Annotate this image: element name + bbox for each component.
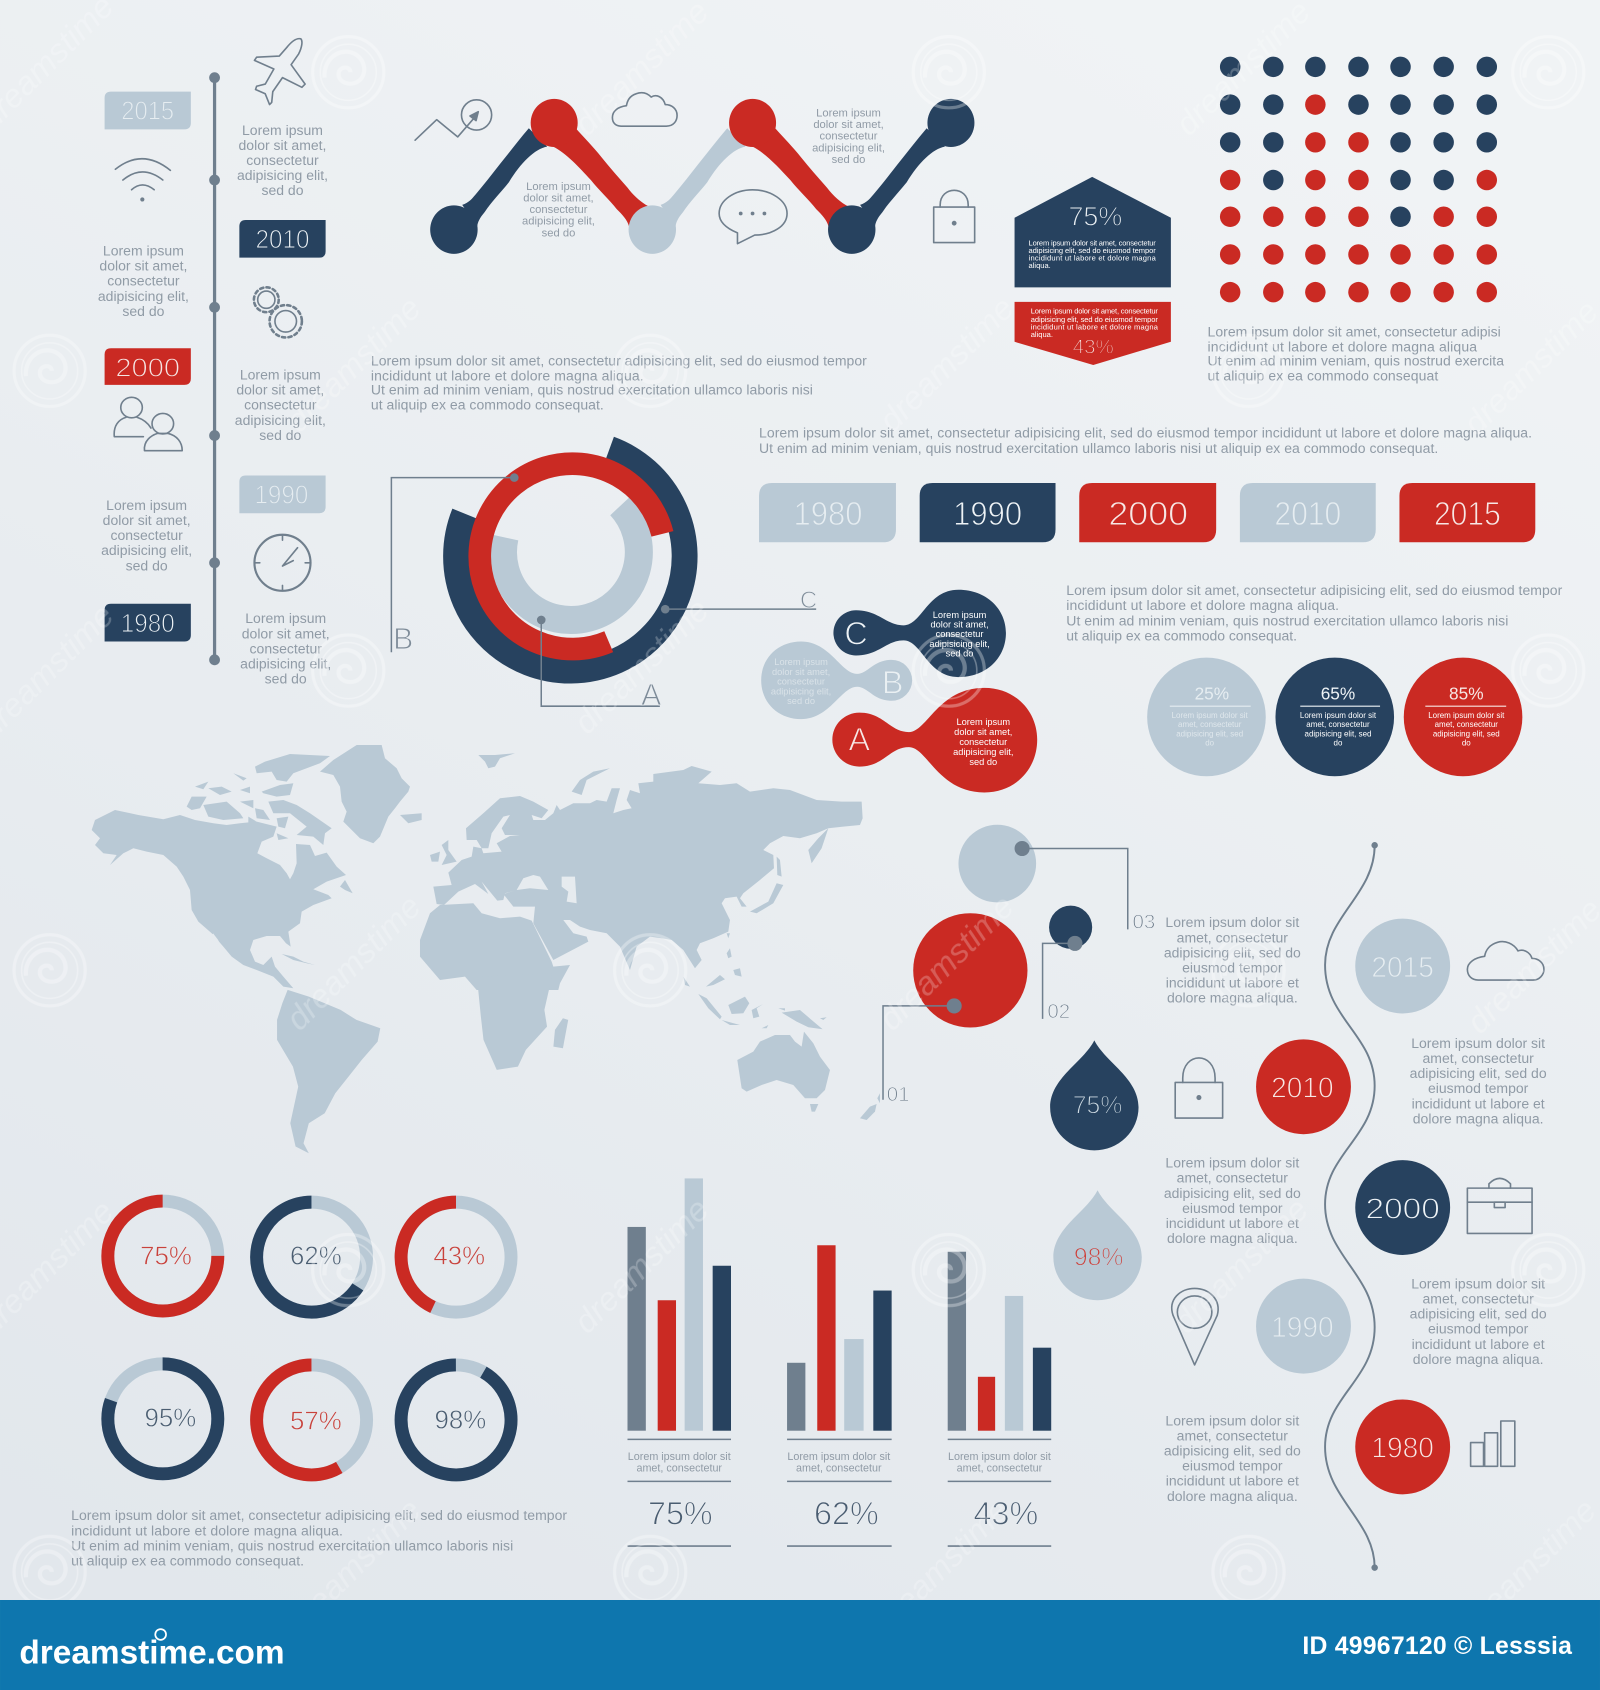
link: navy <box>860 128 945 226</box>
callout A: A <box>641 679 662 712</box>
tab 2015 <box>1399 483 1535 542</box>
panel: donut charts <box>108 1181 531 1495</box>
navy dots <box>1220 57 1497 227</box>
donut 43%: 43% <box>433 1243 485 1271</box>
panel: wavy timeline <box>1050 842 1547 1571</box>
navy hexagon top <box>1015 177 1171 287</box>
text block: dolor sit amet, <box>99 258 187 274</box>
tab 2010: 2010 <box>256 226 309 254</box>
Americas north <box>92 745 422 988</box>
text block: adipisicing elit, <box>240 655 331 671</box>
text block: dolor sit amet, <box>813 119 884 131</box>
Madagascar <box>553 1018 568 1048</box>
text block: incididunt ut labore et <box>1412 1336 1545 1352</box>
text block: dolor sit amet, <box>242 625 330 641</box>
red hexagon bottom <box>1015 302 1171 365</box>
circle 25%: Lorem ipsum dolor sit <box>1172 711 1249 720</box>
paragraph: incididunt ut labore et dolore magna aliqua. <box>71 1522 343 1538</box>
text block: incididunt ut labore et <box>1166 975 1299 991</box>
South America <box>277 990 380 1153</box>
blob A: sed do <box>969 757 997 767</box>
tab 2015: 2015 <box>121 98 174 126</box>
drop 98%: 98% <box>1074 1245 1123 1272</box>
tab 1980: 1980 <box>121 610 175 638</box>
timeline axis <box>209 72 220 665</box>
tab 1990 <box>239 475 326 513</box>
bar chart 62% <box>787 1245 892 1546</box>
text block: eiusmod tempor <box>1182 959 1283 975</box>
text block: Lorem ipsum dolor sit <box>1165 1412 1299 1428</box>
text: dreamstime <box>872 888 1022 1038</box>
callout B <box>391 473 519 656</box>
node 2000 <box>1355 1160 1450 1255</box>
text block: Lorem ipsum dolor sit <box>1165 914 1299 930</box>
blob A: adipisicing elit, <box>953 747 1013 757</box>
bubble 03: 03 <box>1133 910 1155 933</box>
navy hexagon top: incididunt ut labore et dolore magna <box>1029 253 1157 262</box>
bar chart 43%: amet, consectetur <box>957 1463 1043 1475</box>
circle 85% <box>1404 658 1522 776</box>
text block: amet, consectetur <box>1423 1050 1534 1066</box>
bar chart 62%: Lorem ipsum dolor sit <box>787 1451 890 1463</box>
text: dreamstime <box>567 1191 716 1341</box>
panel: wave chain chart <box>371 93 975 413</box>
text block: dolor sit amet, <box>103 512 191 528</box>
blob A: consectetur <box>959 737 1007 747</box>
bar chart 62%: amet, consectetur <box>796 1463 882 1475</box>
blob C <box>833 590 1006 677</box>
text block: incididunt ut labore et <box>1166 1215 1299 1231</box>
blob C: sed do <box>946 649 973 659</box>
text block: dolor sit amet, <box>523 192 594 204</box>
text block: adipisicing elit, <box>522 216 595 228</box>
text block: consectetur <box>110 527 183 543</box>
tab 2010 <box>1240 483 1376 542</box>
node 2015 <box>1355 919 1450 1013</box>
donut 62% <box>236 1181 388 1333</box>
blob A: dolor sit amet, <box>954 727 1012 737</box>
circle 65%: do <box>1334 739 1343 748</box>
circle 85%: do <box>1462 739 1471 748</box>
bar chart 75%: Lorem ipsum dolor sit <box>628 1451 731 1463</box>
text block: consectetur <box>244 397 317 413</box>
icon: gears <box>254 287 302 337</box>
paragraph: ut aliquip ex ea commodo consequat. <box>371 397 604 413</box>
text block: dolore magna aliqua. <box>1413 1351 1544 1367</box>
Oceania <box>683 933 880 1120</box>
paragraph: incididunt ut labore et dolore magna aliqua <box>1208 338 1477 354</box>
text block: sed do <box>122 303 165 319</box>
panel: ring chart <box>391 449 817 712</box>
text block: adipisicing elit, <box>812 142 885 154</box>
ring: red <box>480 464 662 649</box>
blob C: C <box>844 616 868 652</box>
callout B: B <box>393 623 413 656</box>
paragraph: ut aliquip ex ea commodo consequat. <box>1066 627 1297 643</box>
text block: Lorem ipsum dolor sit <box>1411 1035 1545 1051</box>
text block: amet, consectetur <box>1177 929 1288 945</box>
donut 98% <box>381 1345 531 1495</box>
logo swirl <box>155 1629 166 1640</box>
text: dreamstime <box>1166 1191 1316 1341</box>
circle 25%: 25% <box>1195 684 1229 704</box>
panel: year tabs <box>759 425 1535 542</box>
Gulf of California <box>213 934 224 953</box>
paragraph: Ut enim ad minim veniam, quis nostrud exercitation ullamco laboris nisi <box>71 1537 513 1553</box>
text block: Lorem ipsum <box>816 107 881 119</box>
tab 2015: 2015 <box>1434 496 1501 533</box>
circle 65%: amet, consectetur <box>1306 720 1370 729</box>
Eurasia <box>433 766 863 970</box>
text: dreamstime <box>279 290 429 439</box>
drop 75% <box>1050 1040 1139 1150</box>
node 2015: 2015 <box>1371 952 1434 984</box>
blob B: adipisicing elit, <box>771 686 831 696</box>
text block: eiusmod tempor <box>1182 1458 1283 1474</box>
blob A: A <box>849 721 871 757</box>
tab 1990: 1990 <box>953 496 1022 533</box>
icon: people <box>114 397 182 451</box>
red hexagon bottom: adipisicing elit, sed do eiusmod tempor <box>1031 315 1158 324</box>
red hexagon bottom: aliqua. <box>1031 330 1053 339</box>
panel: ABC blobs <box>761 590 1037 792</box>
blob C: adipisicing elit, <box>929 639 990 649</box>
bar chart 43% <box>948 1252 1051 1546</box>
paragraph: incididunt ut labore et dolore magna aliqua. <box>371 368 644 384</box>
red hexagon bottom: Lorem ipsum dolor sit amet, consectetur <box>1031 307 1158 316</box>
north Africa <box>420 903 570 990</box>
blob A <box>832 688 1037 792</box>
icon: speech bubble <box>719 190 787 244</box>
blob C: Lorem ipsum <box>933 610 987 620</box>
bar chart 75% <box>627 1178 731 1546</box>
blob C: consectetur <box>936 629 984 639</box>
text block: consectetur <box>530 204 588 216</box>
text block: adipisicing elit, sed do <box>1164 1443 1301 1459</box>
navy hexagon top: 75% <box>1068 201 1122 231</box>
panel: bubble callouts <box>883 825 1155 1106</box>
icon: trend arrow <box>415 100 492 140</box>
northern islands <box>430 753 828 913</box>
bar chart 75%: 75% <box>648 1496 713 1532</box>
paragraph <box>1208 323 1504 384</box>
icon: wifi <box>115 159 170 201</box>
paragraph: Lorem ipsum dolor sit amet, consectetur adipisi <box>1208 323 1501 339</box>
text block: dolor sit amet, <box>239 137 326 153</box>
donut 75%: 75% <box>140 1243 192 1271</box>
text block: sed do <box>832 154 865 166</box>
tab 1990 <box>920 483 1056 542</box>
panel: vertical timeline <box>98 39 331 687</box>
donut 57%: 57% <box>290 1408 342 1436</box>
tab 2000 <box>105 348 191 385</box>
text block: dolore magna aliqua. <box>1167 1230 1298 1246</box>
donut 57% <box>236 1345 387 1495</box>
drop 98% <box>1053 1190 1142 1300</box>
tab 1990: 1990 <box>254 481 308 509</box>
icon: bars <box>1471 1421 1515 1466</box>
text block: adipisicing elit, sed do <box>1410 1065 1547 1081</box>
text block: consectetur <box>246 152 319 168</box>
text block: Lorem ipsum dolor sit <box>1411 1275 1545 1291</box>
circle 85%: amet, consectetur <box>1435 720 1498 729</box>
text block: incididunt ut labore et <box>1412 1095 1545 1111</box>
text block: Lorem ipsum <box>106 497 187 513</box>
circle 65% <box>1275 658 1394 776</box>
donut 95%: 95% <box>144 1404 196 1432</box>
ring: navy <box>456 449 685 671</box>
paragraph: Ut enim ad minim veniam, quis nostrud exercitation ullamco laboris nisi ut aliquip ex ea commodo consequat. <box>759 440 1438 456</box>
text: dreamstime <box>279 1492 429 1641</box>
nodes <box>430 99 974 254</box>
link: navy <box>462 128 547 226</box>
text block: eiusmod tempor <box>1182 1200 1283 1216</box>
bubble 01 <box>883 913 1027 1106</box>
bubble 02 <box>1043 906 1092 1023</box>
donut 43% <box>383 1184 529 1330</box>
text block: dolore magna aliqua. <box>1167 990 1298 1006</box>
paragraph: Lorem ipsum dolor sit amet, consectetur adipisicing elit, sed do eiusmod tempor <box>371 352 867 368</box>
navy hexagon top: aliqua. <box>1029 261 1051 270</box>
bar chart 75%: amet, consectetur <box>636 1463 722 1475</box>
blob B: Lorem ipsum <box>774 657 828 667</box>
circle 25% <box>1147 658 1266 776</box>
bar chart 43%: Lorem ipsum dolor sit <box>948 1451 1051 1463</box>
world map <box>92 745 880 1153</box>
text block: Lorem ipsum <box>245 610 326 626</box>
Indonesian and Pacific islands <box>683 933 880 1120</box>
text block: adipisicing elit, <box>98 288 189 304</box>
bubble 01: 01 <box>887 1083 910 1106</box>
text block: dolore magna aliqua. <box>1413 1110 1544 1126</box>
node 2010: 2010 <box>1271 1073 1334 1105</box>
panel: hexagon percentages <box>1015 177 1171 365</box>
bar chart 43%: 43% <box>974 1496 1038 1532</box>
bubble 03 <box>958 825 1155 933</box>
text block: adipisicing elit, sed do <box>1164 1185 1301 1201</box>
node 1980: 1980 <box>1371 1433 1434 1465</box>
paragraph <box>759 425 1532 456</box>
donut 98%: 98% <box>435 1407 486 1435</box>
drop 75%: 75% <box>1073 1093 1122 1120</box>
text: dreamstime <box>279 888 429 1038</box>
inland seas <box>517 875 577 903</box>
panel: dot matrix <box>1208 57 1504 384</box>
paragraph <box>371 352 867 413</box>
tab 2000 <box>1079 483 1216 542</box>
Eurasia and north Africa <box>420 753 863 990</box>
text block: adipisicing elit, sed do <box>1164 944 1301 960</box>
text block: adipisicing elit, <box>235 412 326 428</box>
text: dreamstime <box>567 592 716 741</box>
text block: adipisicing elit, <box>101 542 192 558</box>
icon: map pin <box>1172 1288 1218 1365</box>
circle 25%: adipisicing elit, sed <box>1176 729 1243 738</box>
ring: light <box>503 506 639 620</box>
navy hexagon top: adipisicing elit, sed do eiusmod tempor <box>1029 246 1156 255</box>
callout A <box>537 616 662 712</box>
South America and south Africa <box>277 973 568 1153</box>
paragraph <box>71 1507 567 1568</box>
text block: consectetur <box>250 640 322 656</box>
circle 85%: Lorem ipsum dolor sit <box>1428 711 1505 720</box>
red hexagon bottom: incididunt ut labore et dolore magna <box>1031 322 1159 331</box>
tab 1980 <box>759 483 896 542</box>
text block: amet, consectetur <box>1177 1427 1288 1443</box>
node 1990 <box>1256 1279 1351 1374</box>
tab 1980 <box>105 604 191 641</box>
Arctic and Atlantic islands <box>187 754 422 965</box>
bubble 02: 02 <box>1047 1000 1070 1023</box>
paragraph: Lorem ipsum dolor sit amet, consectetur adipisicing elit, sed do eiusmod tempor <box>71 1507 567 1523</box>
paragraph: incididunt ut labore et dolore magna aliqua. <box>1066 597 1339 613</box>
paragraph: ut aliquip ex ea commodo consequat <box>1208 368 1438 384</box>
text block: sed do <box>259 427 302 443</box>
link: light <box>661 128 746 226</box>
circle 85%: adipisicing elit, sed <box>1433 729 1500 738</box>
blob B: sed do <box>787 696 815 706</box>
text block: consectetur <box>107 273 180 289</box>
node 2000: 2000 <box>1365 1193 1440 1225</box>
logo text: dreamstime.com <box>19 1635 285 1672</box>
link: red <box>553 128 649 226</box>
paragraph: Lorem ipsum dolor sit amet, consectetur adipisicing elit, sed do eiusmod tempor incididunt ut labore et dolore magna aliqua. <box>759 425 1532 441</box>
circle 65%: Lorem ipsum dolor sit <box>1300 711 1377 720</box>
paragraph: Ut enim ad minim veniam, quis nostrud exercitation ullamco laboris nisi <box>1066 612 1508 628</box>
tab 2000: 2000 <box>1108 496 1188 533</box>
tab 2015 <box>105 92 191 129</box>
paragraph: Ut enim ad minim veniam, quis nostrud exercita <box>1208 352 1504 368</box>
text block: dolor sit amet, <box>236 382 324 398</box>
wavy line <box>1325 842 1378 1571</box>
bar chart 62%: 62% <box>814 1496 879 1532</box>
circle 65%: adipisicing elit, sed <box>1305 729 1371 738</box>
paragraph: ut aliquip ex ea commodo consequat. <box>71 1552 304 1568</box>
icon: plane <box>254 39 305 105</box>
tab 2010: 2010 <box>1274 496 1341 533</box>
node 2010 <box>1256 1039 1351 1134</box>
text block: Lorem ipsum <box>526 181 591 193</box>
text block: amet, consectetur <box>1423 1290 1534 1306</box>
icon: briefcase <box>1467 1178 1532 1233</box>
text: dreamstime <box>1454 1492 1600 1641</box>
node 1990: 1990 <box>1271 1312 1334 1344</box>
text block: sed do <box>261 182 304 198</box>
node 1980 <box>1355 1399 1450 1494</box>
tab 1980: 1980 <box>794 496 863 533</box>
callout C <box>661 588 817 614</box>
text block: sed do <box>542 227 575 239</box>
text block: sed do <box>126 557 168 573</box>
text block: consectetur <box>820 131 878 143</box>
circle 85%: 85% <box>1449 684 1484 704</box>
circle 65%: 65% <box>1321 684 1355 704</box>
donut 75% <box>108 1201 218 1311</box>
blob B: B <box>882 664 904 700</box>
paragraph <box>1066 582 1563 643</box>
panel: bar charts <box>627 1178 1051 1546</box>
text block: Lorem ipsum <box>242 122 323 138</box>
icon: clock <box>254 535 311 591</box>
circle 25%: amet, consectetur <box>1178 720 1242 729</box>
icon: cloud <box>1467 942 1544 980</box>
donut 95% <box>108 1364 218 1474</box>
panel: percent circles <box>1066 582 1563 776</box>
text block: eiusmod tempor <box>1428 1080 1529 1096</box>
south Africa <box>478 973 552 1070</box>
blob B <box>761 641 912 719</box>
blob C: dolor sit amet, <box>930 619 989 629</box>
tab 2010 <box>239 220 326 258</box>
paragraph: Ut enim ad minim veniam, quis nostrud exercitation ullamco laboris nisi <box>371 382 813 398</box>
icon: padlock <box>934 190 975 243</box>
text block: Lorem ipsum <box>103 243 184 259</box>
text: dreamstime <box>872 290 1022 439</box>
navy hexagon top: Lorem ipsum dolor sit amet, consectetur <box>1029 238 1156 247</box>
blob B: consectetur <box>777 677 825 687</box>
callout C: C <box>800 588 817 614</box>
donut 62%: 62% <box>290 1243 342 1271</box>
text block: adipisicing elit, <box>237 167 328 183</box>
Greenland <box>320 745 410 843</box>
icon: cloud <box>612 93 677 126</box>
Australia <box>737 1032 830 1098</box>
text block: incididunt ut labore et <box>1166 1473 1299 1489</box>
link: red <box>753 128 849 226</box>
image id: ID 49967120 © Lesssia <box>1302 1633 1572 1660</box>
icon: padlock <box>1175 1058 1223 1118</box>
blob B: dolor sit amet, <box>772 667 830 677</box>
text block: amet, consectetur <box>1177 1170 1288 1186</box>
text: dreamstime <box>867 1492 1016 1641</box>
blob A: Lorem ipsum <box>957 717 1010 727</box>
circle 25%: do <box>1205 739 1215 748</box>
paragraph: Lorem ipsum dolor sit amet, consectetur adipisicing elit, sed do eiusmod tempor <box>1066 582 1563 598</box>
tab 2000: 2000 <box>115 354 180 382</box>
text block: dolore magna aliqua. <box>1167 1488 1298 1504</box>
text block: adipisicing elit, sed do <box>1410 1306 1547 1322</box>
text block: Lorem ipsum dolor sit <box>1165 1155 1299 1171</box>
text block: Lorem ipsum <box>240 367 321 383</box>
text block: sed do <box>265 671 307 687</box>
red hexagon bottom: 43% <box>1073 336 1114 359</box>
red dots <box>1220 94 1497 302</box>
footer bar <box>0 1600 1600 1690</box>
North America <box>92 810 346 988</box>
text block: eiusmod tempor <box>1428 1321 1529 1337</box>
